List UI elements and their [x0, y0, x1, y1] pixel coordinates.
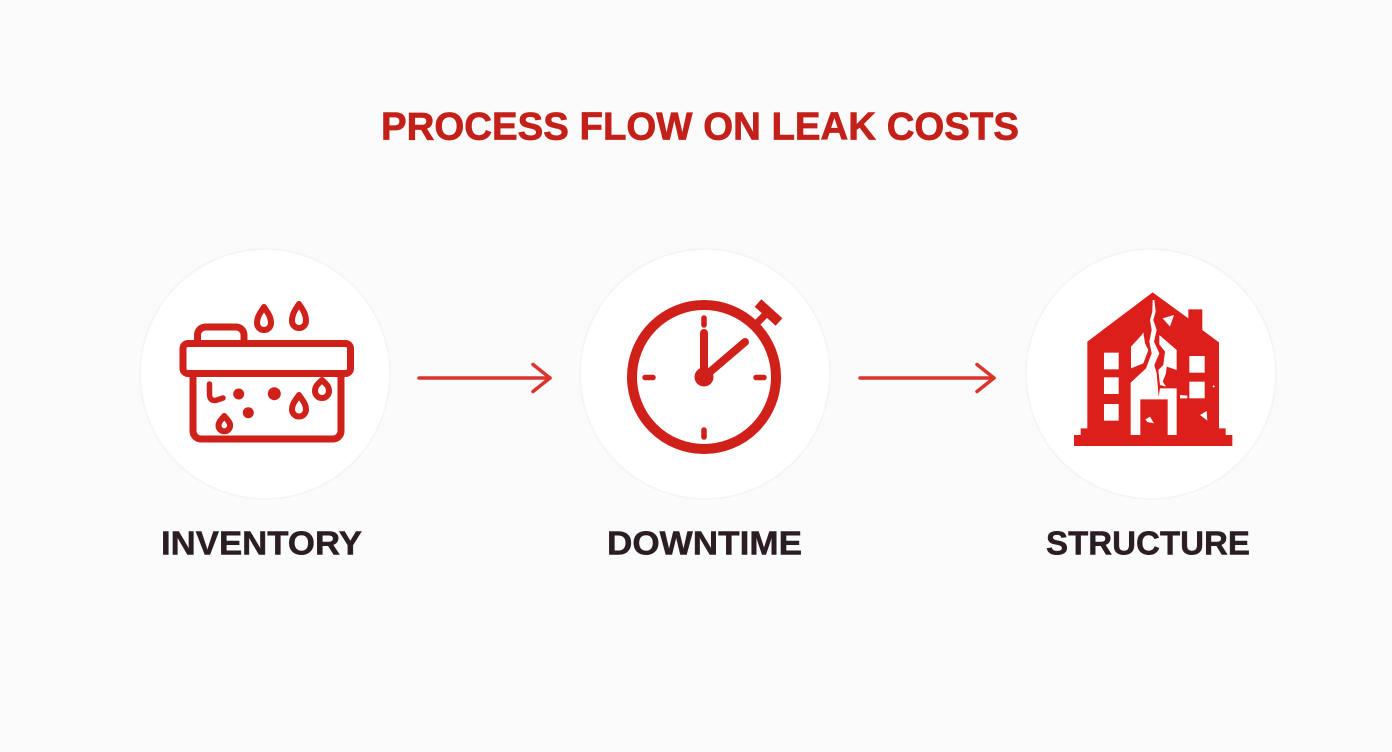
- icon: stopwatch: [632, 303, 779, 449]
- icon: cracked building: [1074, 292, 1232, 446]
- step: structure: [1026, 249, 1276, 562]
- arrow: inventory to downtime: [419, 364, 550, 392]
- label: structure: STRUCTURE: [1046, 526, 1250, 562]
- arrow: downtime to structure: [860, 364, 994, 392]
- label: downtime: DOWNTIME: [607, 526, 802, 562]
- structure circle: [1026, 249, 1276, 499]
- step: inventory: [140, 249, 390, 562]
- icon: leaking box: [183, 304, 350, 439]
- title: PROCESS FLOW ON LEAK COSTS: [381, 106, 1019, 148]
- downtime circle: [580, 249, 830, 499]
- inventory circle: [140, 249, 390, 499]
- step: downtime: [580, 249, 830, 562]
- label: inventory: INVENTORY: [161, 526, 362, 562]
